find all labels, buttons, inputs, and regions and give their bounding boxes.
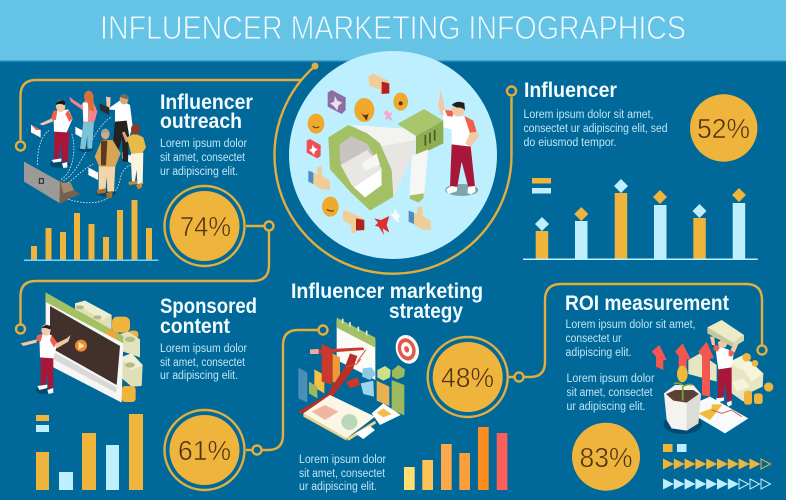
heading: strategy (389, 300, 463, 323)
arrow row: light blue (663, 478, 770, 490)
bar chart (404, 427, 507, 490)
panel: strategy (291, 280, 508, 493)
body text: sit amet, consectet (299, 468, 386, 480)
stat: 74% (164, 186, 244, 266)
megaphone illustration (307, 73, 479, 235)
body text (524, 109, 668, 149)
icon: reaction emojis and stickers (307, 73, 431, 235)
body text: consectet ur adipiscing elit, sed (524, 123, 668, 135)
illustration: charts, calendar, target (298, 318, 423, 441)
body text (299, 454, 386, 493)
body text (566, 319, 696, 359)
header band (0, 0, 786, 62)
title: INFLUENCER MARKETING INFOGRAPHICS (100, 10, 686, 47)
heading (160, 91, 253, 133)
stat: 83%: 83% (580, 442, 632, 473)
illustration: video screen with money and presenter (21, 293, 143, 403)
heading: Influencer (160, 91, 253, 114)
bar chart (36, 414, 143, 490)
megaphone (328, 109, 443, 211)
legend (663, 444, 686, 452)
heading: ROI measurement (565, 292, 729, 315)
heading: content (160, 315, 230, 338)
body text (160, 343, 247, 382)
heading: outreach (160, 110, 242, 133)
body text: Lorem ipsum dolor (160, 138, 247, 150)
stat: 61% (164, 410, 244, 490)
body text 2 (566, 373, 655, 413)
body text 2: Lorem ipsum dolor (566, 373, 655, 385)
body text (160, 138, 247, 178)
stat: 61%: 61% (178, 435, 231, 466)
heading (160, 295, 257, 338)
body text: sit amet, consectet (160, 357, 246, 369)
body text: ur adipiscing elit. (160, 166, 238, 178)
arrow row: gold (663, 458, 770, 470)
illustration: money, arrows, plant, man (652, 320, 773, 434)
stat: 48% (428, 337, 508, 417)
body text: Lorem ipsum dolor (160, 343, 247, 355)
panel: influencer (523, 79, 758, 260)
heading: Influencer (524, 79, 617, 102)
body text: consectet ur (566, 333, 622, 345)
bar chart with diamonds (523, 179, 758, 260)
person shouting (438, 91, 479, 196)
body text: do eiusmod tempor. (524, 137, 616, 149)
illustration: group of people with laptop (24, 91, 146, 204)
panel: sponsored content (21, 293, 257, 490)
body text: adipiscing elit. (566, 347, 632, 359)
connector lines (16, 62, 766, 454)
panel: ROI measurement (565, 292, 773, 491)
body text: ur adipiscing elit. (160, 370, 238, 382)
legend (532, 178, 551, 194)
stat: 83% (572, 423, 640, 491)
stat: 74%: 74% (180, 211, 231, 242)
body text 2: ur adipiscing elit. (566, 401, 646, 413)
body text: Lorem ipsum dolor (299, 454, 386, 466)
stat: 48%: 48% (441, 362, 494, 393)
bar chart (24, 200, 158, 261)
central light circle (289, 51, 497, 259)
stat: 52%: 52% (697, 113, 750, 144)
heading: Sponsored (160, 295, 257, 318)
stat: 52% (690, 94, 757, 162)
body text 2: sit amet, consectet (566, 387, 653, 399)
body text: Lorem ipsum dolor sit amet, (524, 109, 654, 121)
body text: Lorem ipsum dolor sit amet, (566, 319, 696, 331)
body text: sit amet, consectet (160, 152, 246, 164)
heading: Influencer marketing (291, 280, 483, 303)
body text: ur adipiscing elit. (299, 481, 377, 493)
panel: influencer outreach (24, 91, 253, 266)
heading (291, 280, 483, 323)
